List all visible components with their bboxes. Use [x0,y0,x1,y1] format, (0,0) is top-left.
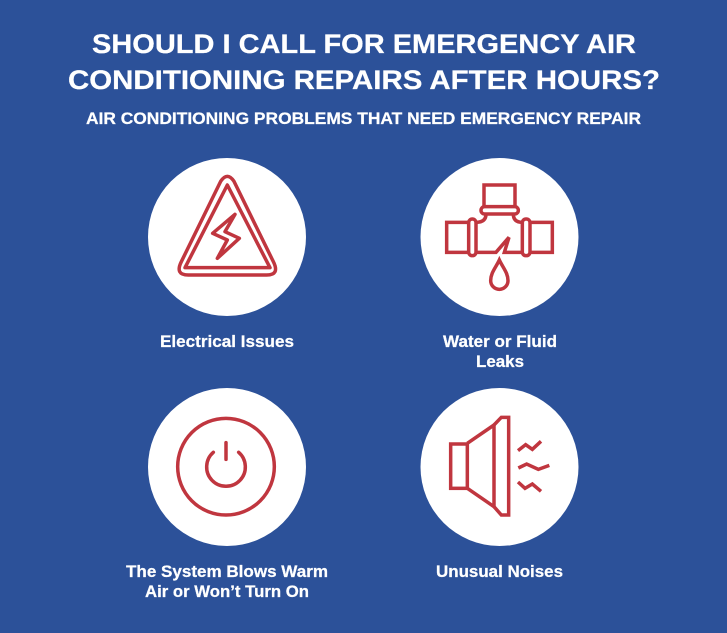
title: CONDITIONING REPAIRS AFTER HOURS? [68,65,660,95]
label: water or fluid leaks [443,333,557,371]
icon: leaking pipe with drop [420,158,578,316]
label: electrical issues: Electrical Issues [160,333,294,351]
panel: system blows warm [126,388,328,601]
label: system blows warm: Air or Won’t Turn On [145,583,309,601]
panel: unusual noises [420,388,578,581]
panel: water or fluid leaks [420,158,578,371]
label: system blows warm: The System Blows Warm [126,563,328,581]
label: water or fluid leaks: Leaks [476,353,524,371]
icon: warning triangle with lightning bolt [148,158,306,316]
title [68,29,660,95]
label: system blows warm [126,563,328,601]
label: unusual noises: Unusual Noises [436,563,563,581]
subtitle: AIR CONDITIONING PROBLEMS THAT NEED EMERGENCY REPAIR [86,109,641,128]
label: water or fluid leaks: Water or Fluid [443,333,557,351]
panel: electrical issues [148,158,306,351]
icon: speaker with sound waves [420,388,578,546]
title: SHOULD I CALL FOR EMERGENCY AIR [92,29,636,59]
icon: power button [148,388,306,546]
